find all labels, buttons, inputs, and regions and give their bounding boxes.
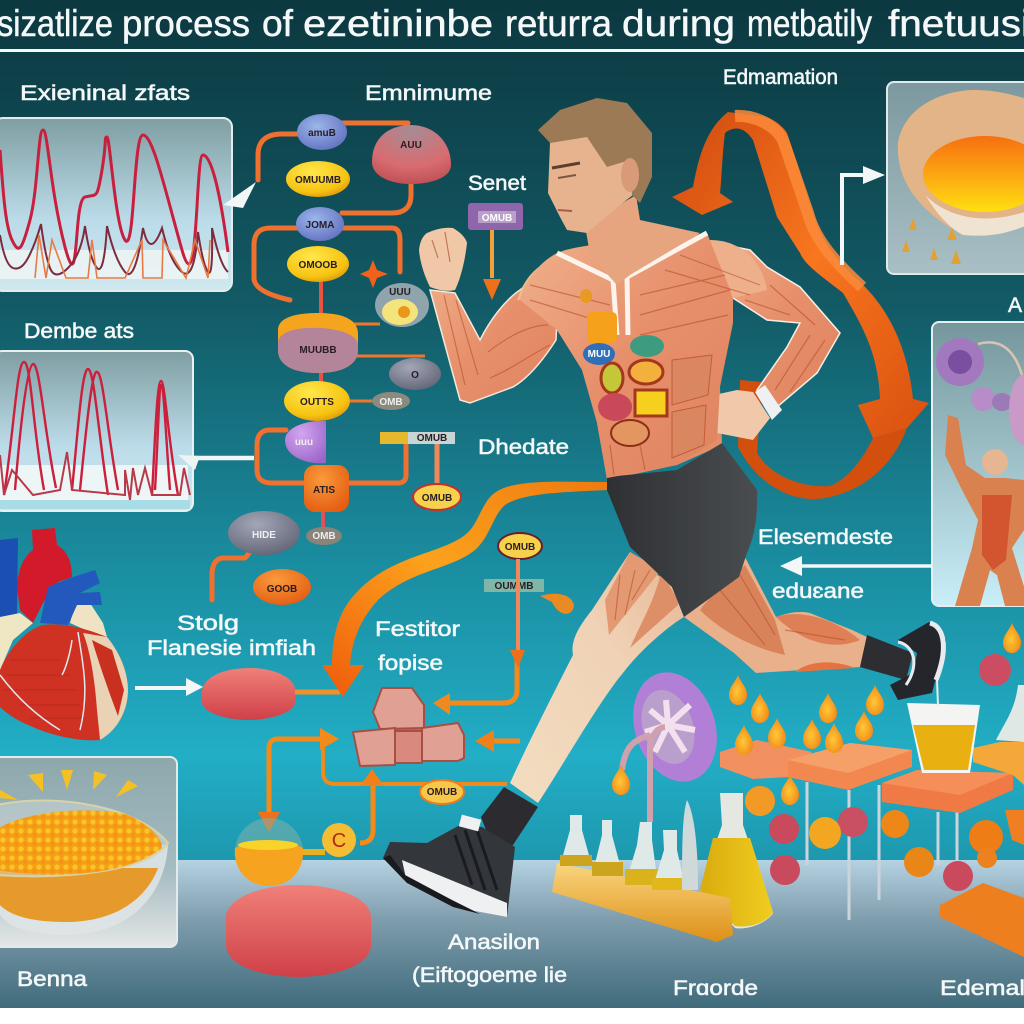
heading: external: Exieninal zfats [20,82,190,105]
pathway network [202,114,461,720]
heading: eiftogoeme: (Eiftogoeme lie [412,964,567,987]
panel: right mid [932,322,1024,606]
back leg [684,557,946,700]
organ: yellow box [635,390,667,416]
node: grey [389,358,441,390]
pill: small: OMUB [427,787,457,798]
pill: upper [498,533,542,559]
node: grey big: HIDE [252,530,276,541]
flask: one [560,815,592,866]
organ: lower [611,420,649,446]
sponge: one [720,740,812,779]
title: ezetininbe [303,3,493,44]
node: blue two [296,207,344,241]
sponge: three [882,770,1013,813]
heading: elesemdeste: Elesemdeste [758,526,893,549]
panel: bowl [0,757,177,947]
organ: orange oval [629,360,663,384]
icon: heart [0,528,128,740]
sponge tables [720,623,1024,957]
icon: purple cell [936,338,1024,445]
heading: eduaane: eduɛane [772,580,864,603]
organ: green [630,335,664,357]
heading: dhedate: Dhedate [478,436,569,459]
wristband [755,385,782,420]
node: grey: O [411,370,419,381]
arrow: chart two link [178,455,254,470]
title: process [122,3,250,44]
icon: small drop [540,594,574,614]
node: yellow three [284,381,350,421]
heading: edemal: Edemal [940,977,1024,1000]
node: cylinder [278,313,358,373]
arrow: up to meat [360,769,384,843]
flask: tall [682,800,698,890]
badge: C: C [332,830,346,852]
node: small grey two [306,527,342,545]
node: dome [372,125,451,184]
node: purple: uuu [295,437,313,448]
label bar [380,432,455,444]
flask: two [592,820,623,876]
node: red disc [202,668,295,720]
organ: yellow [587,312,617,343]
icon: kidney [612,661,730,822]
abdominals [672,355,712,458]
front leg [383,552,684,917]
disc: big red [226,885,371,977]
lower torso [597,387,722,480]
node: yellow two [287,246,349,282]
node: yellow two: OMOOB [299,260,337,271]
flask: right [996,685,1024,742]
organ: blue [583,343,615,365]
icon: sparks [0,770,138,800]
torso [520,233,760,478]
icon: purple sign [468,203,523,300]
node: blue [297,114,347,150]
node: purple [285,421,326,463]
node: blue: amuB [308,128,336,139]
node: orange: ATIS [313,485,335,496]
panel: callout pointer [223,182,256,208]
arrow: large orange [322,482,608,697]
title: returra [505,3,612,44]
organ: colourful [601,363,623,393]
flask: three [625,822,658,885]
node: red oval [413,484,461,510]
label: green bar [484,579,544,592]
node: yellow: OMUUMB [295,175,341,186]
node: orange oval [253,569,311,605]
node: small grey two: OMB [312,531,336,542]
node: orange oval: GOOB [267,584,297,595]
arrow: to flask [258,728,339,832]
arrow: heart to disc [135,678,203,696]
flask: round [235,818,303,886]
tray [552,863,733,942]
hand [705,390,770,440]
title: metbatily [747,3,872,44]
badge: C [322,823,356,857]
block: orange [940,883,1024,957]
heading: benna: Benna [17,968,87,991]
title: fnetuusi [888,3,1024,44]
icon: purple sign: OMUB [482,213,512,224]
node: yellow [286,161,350,197]
small drops [902,218,961,264]
node: egg bubble [375,283,429,327]
node: orange [304,465,349,512]
shorts [607,443,757,617]
arrow: to top block [433,650,525,715]
node: dome: AUU [400,140,422,151]
bowl body [0,845,168,935]
label bar: OMUB [417,433,447,444]
title [0,3,1024,52]
node: red oval: OMUB [422,493,452,504]
heading: hanesie: Flanesie imfiah [147,637,316,660]
heading: senet: Senet [468,172,526,195]
bottom white strip [0,1008,1024,1024]
heading: edmamation: Edmamation [723,66,838,89]
title: of [262,3,294,44]
runner figure [383,98,946,917]
neck [585,195,700,285]
panel: second chart [0,351,193,511]
label: green bar: OUMMB [495,581,533,592]
heading: A: A [1008,294,1022,317]
sock [860,635,913,680]
title: sizatlize [0,3,113,44]
arrow: to right block [475,730,520,752]
heading: festitor: Festitor [375,618,460,641]
node: grey big [228,511,300,555]
shoe [890,622,946,700]
right arm [700,240,840,440]
glass [907,703,980,773]
organ: red [598,393,632,421]
connector lines [212,123,437,692]
left arm [419,228,560,403]
node: cylinder: MUUBB [299,345,337,356]
heading: fopise: fopise [378,652,443,675]
pill: upper: OMUB [505,542,535,553]
meat blocks [353,688,464,766]
sock [481,787,538,857]
figure: muscle man [945,415,1024,606]
heading: enzyme: Emnimume [365,82,492,105]
shoe [383,815,515,917]
node: small grey [372,392,410,410]
flask: large [700,793,773,928]
head [538,98,652,233]
arrow: to top right panel [842,166,885,265]
node: small grey: OMB [379,397,403,408]
lower pathway [226,533,574,977]
node: egg bubble: UUU [389,287,411,298]
link bar [300,849,325,855]
pill: small [420,780,464,804]
panel: top right [887,82,1024,274]
icon: star [360,260,388,288]
fist [419,228,467,291]
drops [729,623,1021,805]
flask: four [652,830,686,890]
loop line [323,748,507,784]
heading: stolg: Stolg [177,612,239,635]
flasks and tray [552,793,773,942]
organ: blue: MUU [588,349,610,360]
fruit [745,654,1024,891]
heading: dembe: Dembe ats [24,320,134,343]
heading: froorde: Frɑorde [673,977,758,1000]
organ: small [580,289,592,303]
arrow: orange ribbon [672,112,929,499]
sponge: two [788,743,912,790]
heading: anasilon: Anasilon [448,931,540,954]
panel: external chart [0,118,232,291]
node: blue two: JOMA [306,220,334,231]
arrow: right mid to label [780,556,932,576]
sponge: four [973,742,1024,785]
title: during [622,3,735,44]
node: yellow three: OUTTS [300,397,334,408]
